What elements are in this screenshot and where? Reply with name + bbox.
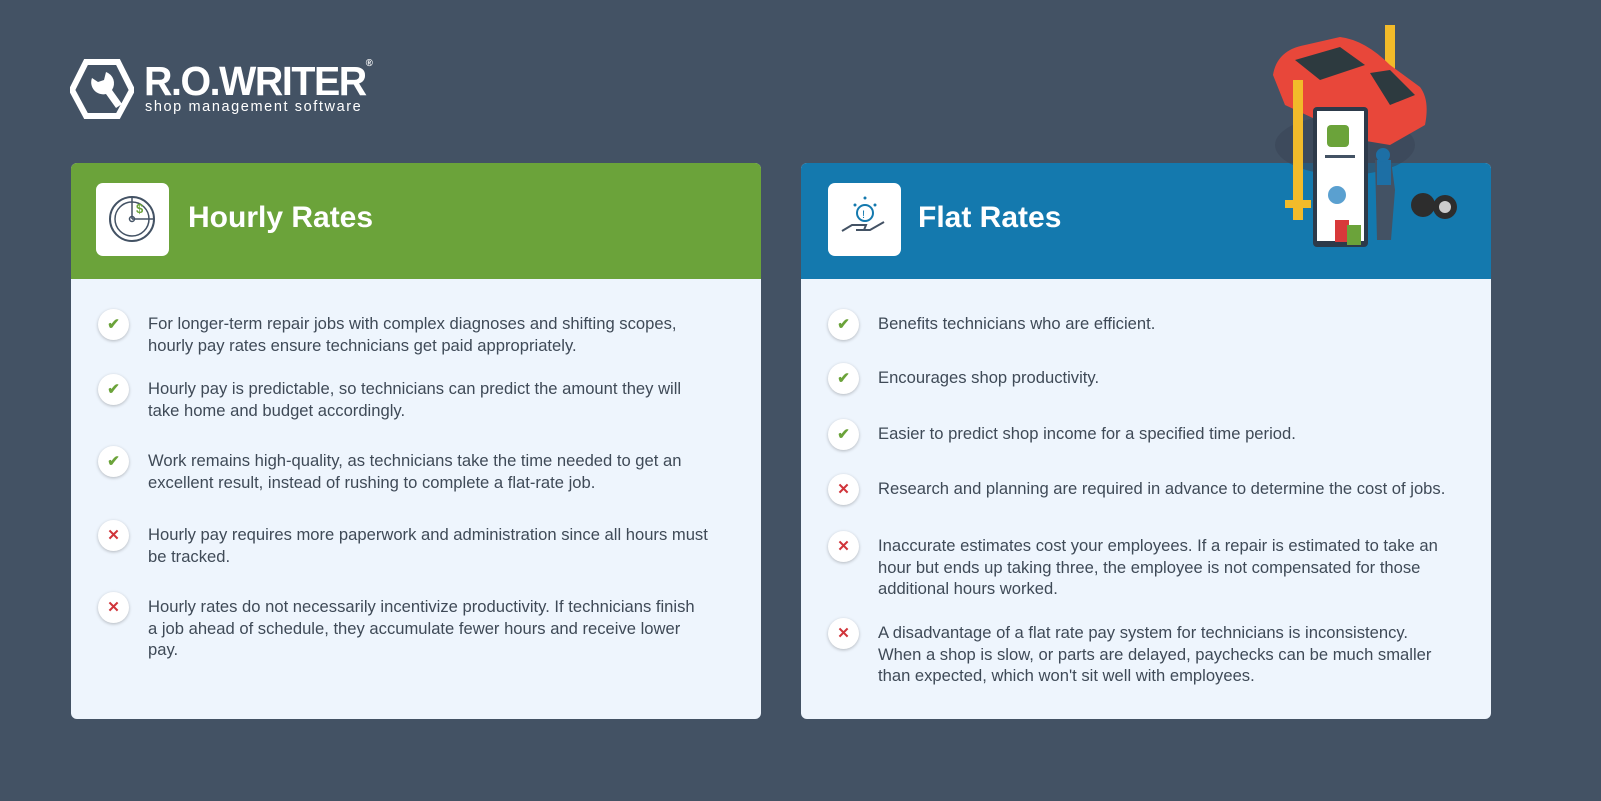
pro 3 (826, 418, 1296, 452)
pro 2: Hourly pay is predictable, so technicians can predict the amount they will take home and budget accordingly. (148, 379, 681, 420)
panel: hourly rates (71, 163, 761, 719)
pro 1 (826, 308, 1155, 342)
pro 3: Work remains high-quality, as technicians take the time needed to get an excellent result, instead of rushing to complete a flat-rate job. (148, 451, 681, 492)
panel: flat rates: ✕ (837, 481, 850, 498)
icon: hand coin: ! (862, 209, 865, 221)
header: hourly (71, 163, 761, 279)
con 1: Research and planning are required in advance to determine the cost of jobs. (878, 479, 1445, 498)
panel: flat rates: ✔ (837, 426, 850, 443)
header: flat (801, 163, 1491, 279)
panel: flat rates: ✔ (837, 316, 850, 333)
pro 1: Benefits technicians who are efficient. (878, 314, 1155, 333)
heading: flat rates: Flat Rates (918, 201, 1061, 234)
logo: R.O.WRITER® (144, 58, 371, 104)
pro 2 (826, 362, 1099, 396)
panel: hourly rates: ✕ (107, 527, 120, 544)
logo (70, 58, 373, 119)
panel: hourly rates: ✔ (107, 453, 120, 470)
icon: hand coin (828, 183, 901, 256)
icon: clock dollar (96, 183, 169, 256)
pro 1: For longer-term repair jobs with complex diagnoses and shifting scopes, hourly pay rates ensure technicians get paid appropriately. (148, 314, 676, 354)
panel: flat rates: ✕ (837, 625, 850, 642)
panel: hourly rates: ✔ (107, 381, 120, 398)
heading: hourly rates: Hourly Rates (188, 201, 373, 234)
panel: hourly rates: ✔ (107, 316, 120, 333)
logo: shop management software (145, 99, 362, 115)
con 3: A disadvantage of a flat rate pay system for technicians is inconsistency. When a shop is slow, or parts are delayed, paychecks can be much smaller than expected, which won't sit well with employees. (878, 623, 1431, 685)
icon: clock dollar: $ (136, 201, 144, 216)
pro 3: Easier to predict shop income for a specified time period. (878, 424, 1296, 443)
panel: hourly rates: ✕ (107, 599, 120, 616)
panel: flat rates: ✔ (837, 370, 850, 387)
con 1 (826, 474, 1445, 508)
con 2: Hourly rates do not necessarily incentivize productivity. If technicians finish a job ahead of schedule, they accumulate fewer hours and receive lower pay. (148, 597, 695, 659)
con 2: Inaccurate estimates cost your employees. If a repair is estimated to take an hour but ends up taking three, the employee is not compensated for those additional hours worked. (878, 536, 1438, 598)
illustration: car on lift with mechanic (1273, 25, 1457, 247)
panel: flat rates: ✕ (837, 538, 850, 555)
pro 2: Encourages shop productivity. (878, 368, 1099, 387)
con 1: Hourly pay requires more paperwork and administration since all hours must be tracked. (148, 525, 708, 566)
panel: flat rates (801, 163, 1491, 719)
